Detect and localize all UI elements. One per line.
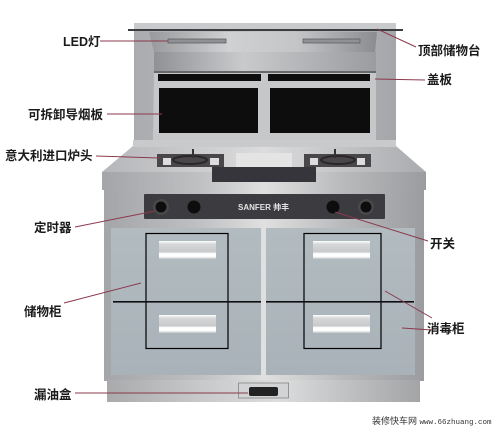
door dividers — [113, 301, 414, 303]
label: cover: 盖板 — [427, 72, 453, 87]
label: switch: 开关 — [430, 236, 456, 251]
top storage shelf — [128, 23, 403, 31]
storage cabinet outline — [146, 234, 228, 348]
panel: left door — [111, 228, 261, 375]
leader lines — [64, 29, 432, 393]
cooker unit — [102, 23, 426, 402]
label: smoke guide: 可拆卸导烟板 — [28, 107, 104, 122]
label: timer: 定时器 — [34, 220, 72, 235]
burner: left — [157, 149, 224, 167]
brand: SANFER 帅丰 — [238, 202, 289, 212]
knob — [358, 199, 374, 215]
counter front — [102, 172, 426, 190]
panel: right door — [266, 228, 415, 375]
oil leak box — [238, 383, 288, 398]
LED lights — [168, 39, 360, 43]
label: burner: 意大利进口炉头 — [5, 148, 93, 163]
centre vent — [212, 167, 316, 182]
panel: cabinet body — [104, 190, 424, 381]
knob: timer — [153, 199, 169, 215]
label: LED: LED灯 — [63, 35, 101, 49]
label: sterilizer: 消毒柜 — [427, 321, 465, 336]
panel: base plinth — [107, 380, 420, 402]
label: top storage: 顶部储物台 — [418, 43, 481, 58]
knob — [188, 200, 200, 214]
watermark: 装修快车网 www.66zhuang.com — [372, 415, 492, 427]
sink plate — [236, 153, 292, 167]
label: oil box: 漏油盒 — [34, 387, 72, 402]
panel: rear backsplash — [134, 23, 396, 147]
panel: countertop surface — [102, 140, 426, 172]
removable smoke guide panels — [159, 88, 370, 133]
drawer handles — [159, 241, 370, 333]
panel: hood interior — [149, 32, 377, 140]
label: storage cabinet: 储物柜 — [24, 304, 62, 319]
knob: switch — [326, 200, 340, 214]
sterilizer cabinet outline — [304, 234, 381, 348]
cover plates — [158, 74, 370, 81]
burner: right — [304, 149, 371, 167]
control panel — [144, 194, 385, 219]
